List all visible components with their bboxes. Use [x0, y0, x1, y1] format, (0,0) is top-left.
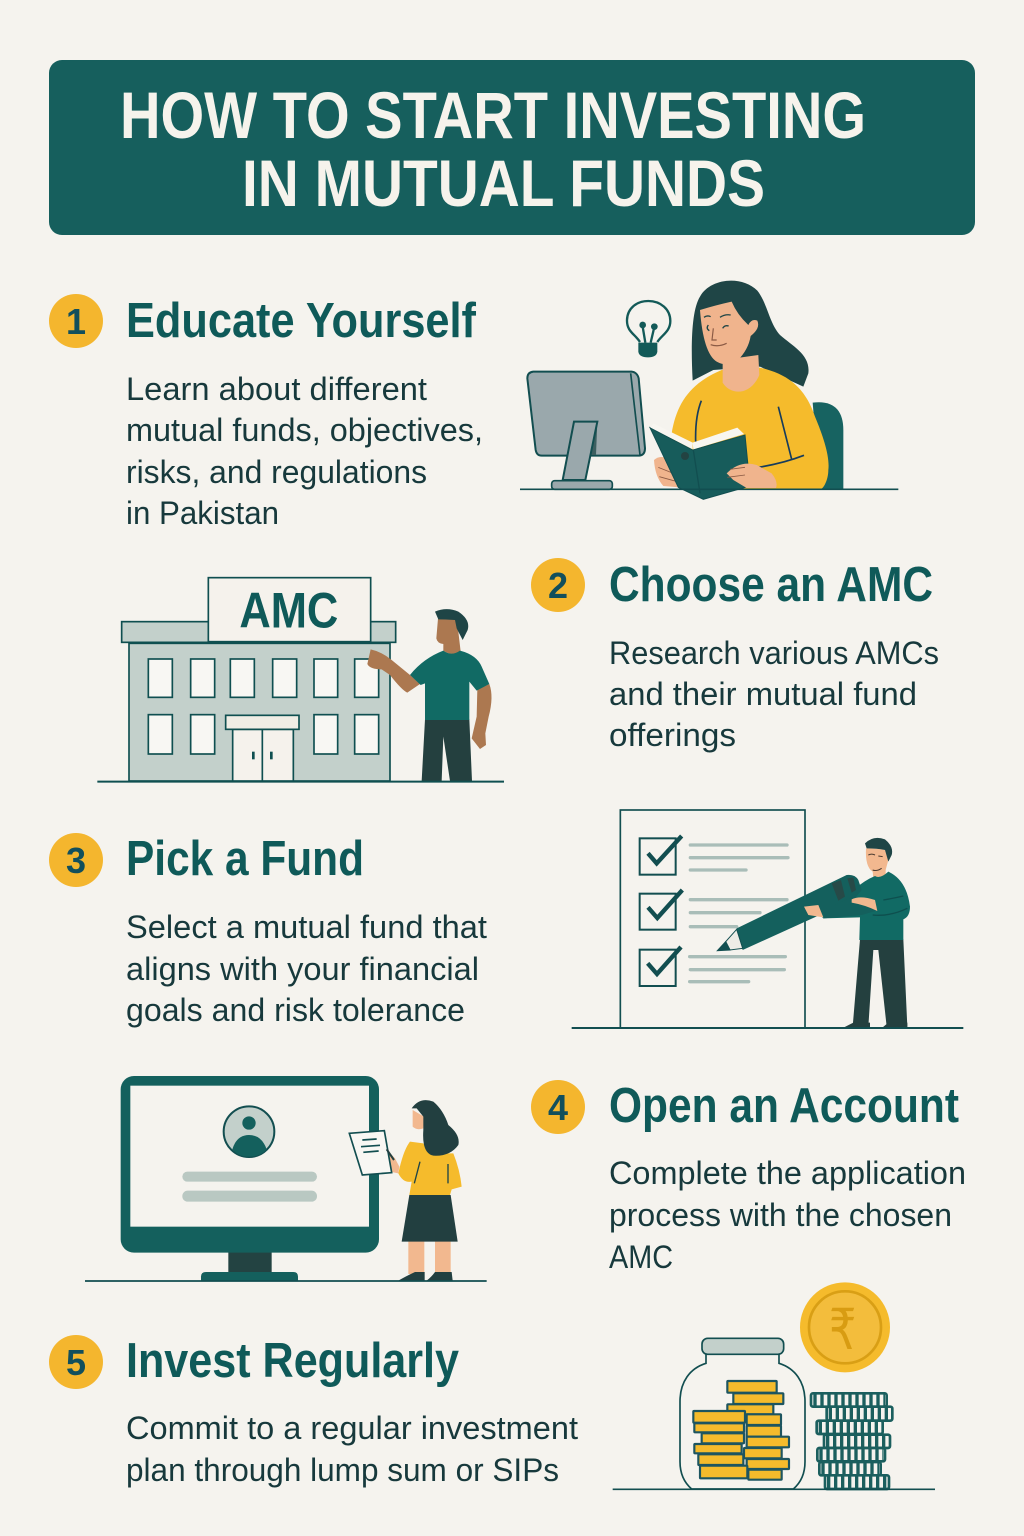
rupee coin: ₹	[829, 1297, 856, 1363]
illustration: checklist with man and pen	[572, 810, 963, 1028]
number badge 3: 3	[66, 840, 86, 881]
title banner: HOW TO START INVESTING	[120, 78, 866, 152]
number badge 4: 4	[548, 1087, 568, 1128]
heading: educate yourself: Educate Yourself	[126, 294, 477, 348]
woman with document	[349, 1100, 462, 1281]
ground line	[572, 1025, 963, 1031]
heading: choose an AMC: Choose an AMC	[609, 558, 933, 612]
open book	[650, 423, 777, 499]
text block: step 4 description: AMC	[609, 1239, 673, 1275]
ground line	[97, 779, 504, 785]
text block: step 4 description: Complete the application	[609, 1155, 966, 1191]
chair	[813, 402, 843, 489]
text block: step 4 description	[609, 1155, 966, 1275]
title banner: IN MUTUAL FUNDS	[242, 146, 765, 220]
text block: step 1 description: in Pakistan	[126, 495, 279, 531]
number badge 2: 2	[548, 565, 568, 606]
panel: step 4 open an account text	[531, 1079, 966, 1275]
illustration: woman reading at computer	[520, 281, 898, 499]
number badge 3	[49, 833, 103, 887]
text block: step 2 description: Research various AMCs	[609, 635, 939, 671]
man holding giant pen	[818, 838, 910, 1027]
text block: step 4 description: process with the chosen	[609, 1197, 952, 1233]
number badge 1	[49, 294, 103, 348]
panel: step 1 educate yourself text	[49, 294, 483, 531]
ground line	[85, 1278, 487, 1283]
checklist document	[620, 810, 805, 1028]
text block: step 5 description: Commit to a regular investment	[126, 1410, 578, 1446]
text block: step 1 description: mutual funds, objectives,	[126, 412, 483, 448]
AMC sign: AMC	[239, 583, 338, 639]
illustration: AMC building with man	[97, 578, 504, 782]
number badge 5: 5	[66, 1342, 86, 1383]
text block: step 3 description: aligns with your financial	[126, 951, 479, 987]
illustration: coin jar and coins	[613, 1282, 935, 1489]
title banner	[49, 60, 975, 235]
gold coins inside jar	[693, 1381, 789, 1480]
monitor	[527, 372, 645, 489]
icon: light bulb	[627, 301, 670, 357]
number badge 2	[531, 558, 585, 612]
ground line	[613, 1487, 935, 1492]
rupee coin	[800, 1282, 890, 1372]
text block: step 2 description	[609, 635, 939, 753]
text block: step 1 description	[126, 371, 483, 531]
form field bars	[182, 1172, 317, 1202]
text block: step 3 description	[126, 909, 487, 1028]
panel: step 2 choose an AMC text	[531, 558, 939, 753]
number badge 4	[531, 1080, 585, 1134]
building	[122, 622, 396, 781]
text block: step 3 description: Select a mutual fund that	[126, 909, 487, 945]
man pointing at building	[367, 609, 492, 781]
woman figure	[672, 281, 829, 489]
panel: step 5 invest regularly text	[49, 1334, 578, 1488]
text block: step 5 description: plan through lump sum or SIPs	[126, 1452, 559, 1488]
panel: step 3 pick a fund text	[49, 832, 487, 1028]
text block: step 1 description: Learn about different	[126, 371, 427, 407]
heading: pick a fund: Pick a Fund	[126, 832, 364, 886]
text block: step 5 description	[126, 1410, 578, 1488]
giant pen	[717, 875, 877, 951]
heading: open an account: Open an Account	[609, 1079, 959, 1133]
glass jar	[680, 1338, 805, 1489]
teal coin stack	[811, 1393, 892, 1489]
text block: step 2 description: and their mutual fund	[609, 676, 917, 712]
profile avatar icon	[224, 1106, 274, 1157]
illustration: computer with profile and woman	[85, 1076, 487, 1281]
AMC sign	[208, 578, 371, 642]
ground line	[520, 487, 898, 492]
text block: step 2 description: offerings	[609, 717, 736, 753]
number badge 5	[49, 1335, 103, 1389]
heading: invest regularly: Invest Regularly	[126, 1334, 459, 1388]
text block: step 1 description: risks, and regulations	[126, 454, 427, 490]
text block: step 3 description: goals and risk tolerance	[126, 992, 465, 1028]
number badge 1: 1	[66, 301, 86, 342]
desktop monitor	[121, 1076, 379, 1281]
